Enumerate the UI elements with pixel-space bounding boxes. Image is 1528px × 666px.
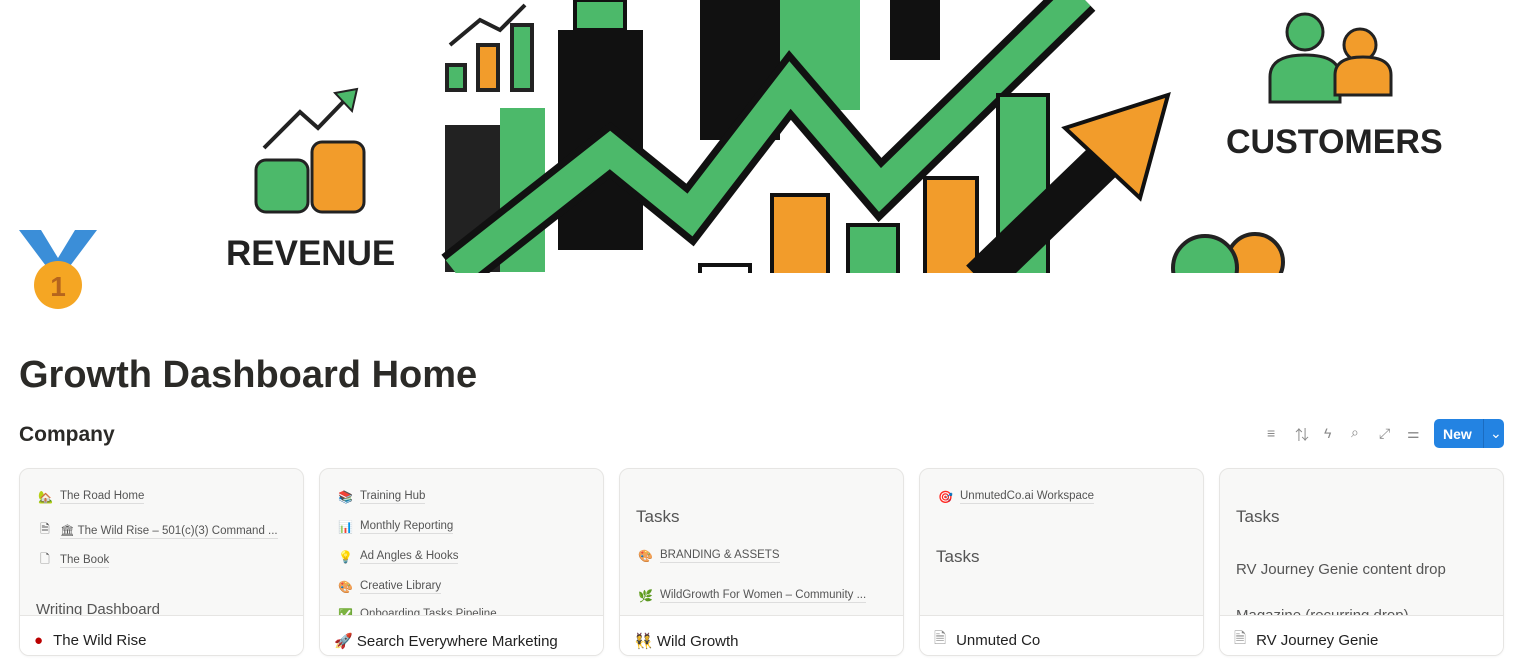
icon: revenue arrow [264, 89, 357, 148]
title: Growth Dashboard Home [19, 354, 477, 396]
card: Search Everywhere Marketing: 📊 [338, 520, 353, 534]
card: The Wild Rise: ● [34, 632, 43, 649]
card: Wild Growth: 🌿 [638, 589, 653, 603]
card: Unmuted Co: 🎯 [938, 490, 953, 504]
card: Unmuted Co: 🗎 [934, 630, 946, 647]
card: Search Everywhere Marketing: 💡 [338, 550, 353, 564]
card: Search Everywhere Marketing: ✅ [338, 608, 353, 622]
card: The Wild Rise: 🗋 [40, 552, 50, 566]
card: Search Everywhere Marketing: Onboarding Tasks Pipeline [360, 608, 497, 620]
black arrow [980, 95, 1168, 280]
icon: medal: 1 [50, 271, 66, 302]
card: RV Journey Genie: Tasks [1236, 507, 1279, 526]
bars [700, 95, 1048, 275]
cover illustration [226, 0, 1443, 273]
button: New [1434, 419, 1504, 448]
card: The Wild Rise: The Road Home [60, 490, 144, 502]
toolbar [1267, 419, 1504, 448]
icon: coins [256, 142, 364, 212]
card: Search Everywhere Marketing: 🚀 Search Everywhere Marketing [334, 632, 558, 650]
toolbar: ϟ [1324, 425, 1331, 441]
card: The Wild Rise: 🏡 [38, 490, 53, 504]
customers label: CUSTOMERS [1226, 123, 1443, 161]
green zigzag trend [455, 0, 1080, 272]
card: Wild Growth [619, 468, 904, 656]
icon: gear coin [1173, 234, 1283, 300]
card: The Wild Rise: 🗎 [40, 522, 50, 536]
revenue label: REVENUE [226, 234, 395, 273]
card: Search Everywhere Marketing: Monthly Reporting [360, 520, 453, 532]
card: Wild Growth: BRANDING & ASSETS [660, 549, 780, 561]
card: Unmuted Co: UnmutedCo.ai Workspace [960, 490, 1094, 502]
card: RV Journey Genie: 🗎 [1234, 630, 1246, 647]
card: Search Everywhere Marketing: 📚 [338, 490, 353, 504]
card: Wild Growth: WildGrowth For Women – Community ... [660, 589, 866, 601]
icon: customers [1270, 14, 1391, 102]
card: Search Everywhere Marketing: 🎨 [338, 580, 353, 594]
card: The Wild Rise [19, 468, 304, 656]
card: Wild Growth: 🎨 [638, 549, 653, 563]
card: Unmuted Co: Unmuted Co [956, 632, 1040, 649]
card: Search Everywhere Marketing: Creative Library [360, 580, 441, 592]
toolbar: ⚌ [1407, 425, 1420, 441]
card: The Wild Rise: Writing Dashboard [36, 601, 160, 618]
toolbar: ⇅ [1295, 427, 1309, 443]
card: Search Everywhere Marketing: Ad Angles & Hooks [360, 550, 458, 562]
small bar chart [447, 5, 532, 90]
card: The Wild Rise: 🏛 The Wild Rise – 501(c)(3) Command ... [60, 524, 278, 536]
card: RV Journey Genie: RV Journey Genie content drop [1236, 561, 1446, 578]
toolbar: ≡ [1267, 425, 1275, 441]
card: Unmuted Co: Tasks [936, 547, 979, 566]
card: The Wild Rise: The Wild Rise [53, 632, 146, 649]
card: The Wild Rise: The Book [60, 554, 109, 566]
card: RV Journey Genie: RV Journey Genie [1256, 632, 1378, 649]
card: Search Everywhere Marketing [319, 468, 604, 656]
card: Unmuted Co [919, 468, 1204, 656]
card: Search Everywhere Marketing: Training Hub [360, 490, 425, 502]
button: New: New [1443, 426, 1472, 442]
toolbar: ⌕ [1351, 424, 1359, 440]
button: New: ⌄ [1490, 425, 1502, 441]
buildings [445, 0, 940, 272]
card: Wild Growth: Tasks [636, 507, 679, 526]
card: RV Journey Genie [1219, 468, 1504, 656]
icon: medal [19, 230, 97, 309]
section heading: Company [19, 423, 115, 446]
toolbar: ⤢ [1379, 425, 1390, 441]
card: RV Journey Genie: Magazine (recurring drop) [1236, 607, 1409, 624]
card: Wild Growth: 👯 Wild Growth [634, 632, 739, 650]
